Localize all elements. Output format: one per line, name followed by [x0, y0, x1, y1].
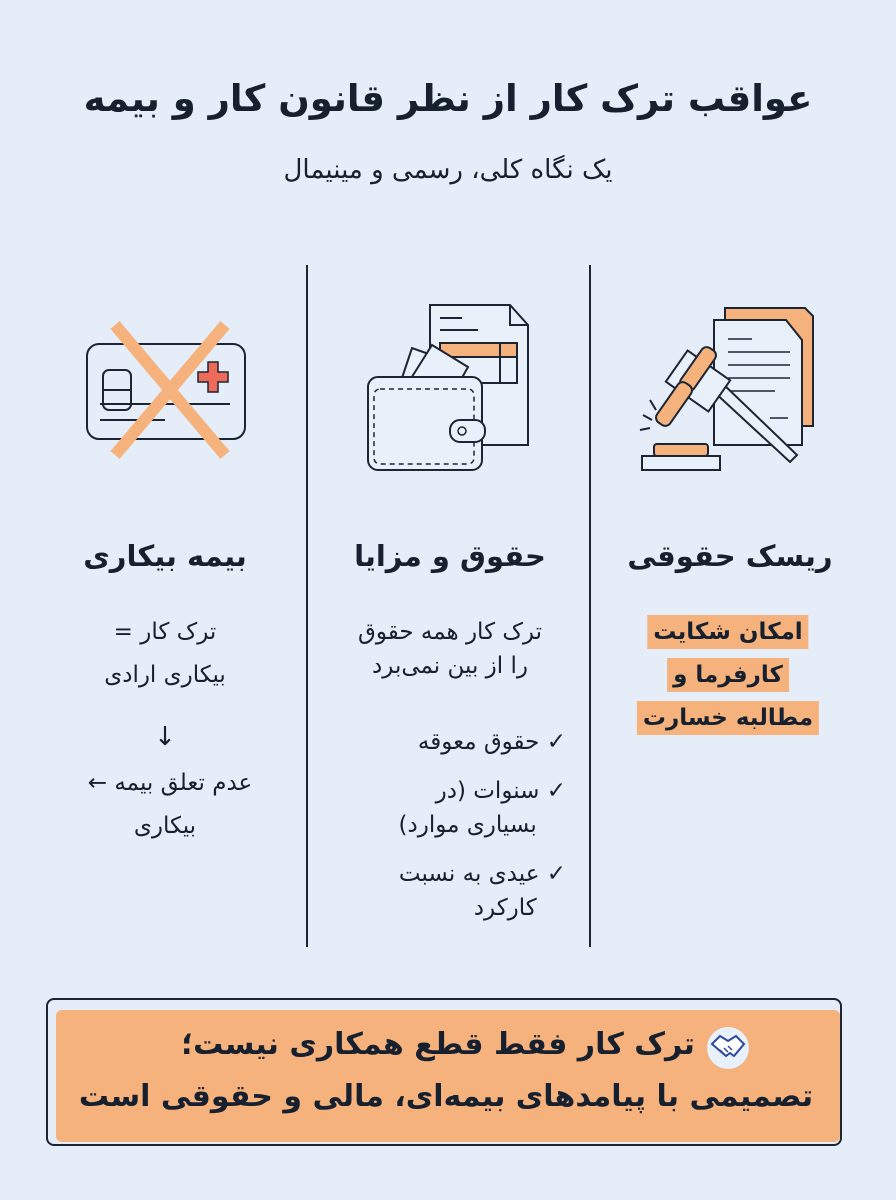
- checklist: ✓ سنوات (در: [436, 778, 566, 804]
- checklist: بسیاری موارد): [399, 812, 537, 838]
- panel: unemployment insurance: [83, 539, 252, 839]
- callout: bottom conclusion: [46, 998, 842, 1146]
- callout: bottom conclusion: تصمیمی با پیامدهای بیمه‌ای، مالی و حقوقی است: [79, 1079, 813, 1114]
- icon: gavel and documents: [640, 307, 814, 471]
- panel: legal risk: [627, 539, 833, 735]
- checklist: کارکرد: [474, 895, 537, 921]
- panel: rights and benefits: را از بین نمی‌برد: [372, 653, 528, 679]
- text: no unemployment insurance: عدم تعلق بیمه ←: [88, 770, 252, 796]
- panel: legal risk: مطالبه خسارت: [643, 705, 813, 731]
- highlighted text: employer complaint: امکان شکایت: [653, 619, 803, 645]
- text: conclusion: ترک کار فقط قطع همکاری نیست؛: [181, 1027, 695, 1062]
- subtitle: یک نگاه کلی، رسمی و مینیمال: [284, 155, 612, 185]
- panel: legal risk: کارفرما و: [673, 662, 783, 688]
- text: quitting equals voluntary unemployment: ترک کار =: [114, 619, 216, 645]
- title: عواقب ترک کار از نظر قانون کار و بیمه: [84, 77, 812, 120]
- text: quitting doesn't remove rights: ترک کار همه حقوق: [358, 619, 542, 645]
- icon: wallet and document: [367, 304, 529, 471]
- heading: legal risk: ریسک حقوقی: [627, 539, 833, 573]
- panel: rights and benefits: [354, 539, 566, 921]
- heading: rights and benefits: حقوق و مزایا: [354, 539, 546, 573]
- heading: unemployment insurance: بیمه بیکاری: [83, 539, 247, 573]
- panel: unemployment insurance: بیکاری ارادی: [104, 662, 226, 688]
- icon: handshake: [707, 1027, 749, 1069]
- checklist: [399, 729, 566, 921]
- arrow: down: ↓: [154, 722, 176, 752]
- checklist: ✓ عیدی به نسبت: [399, 861, 566, 887]
- panel: unemployment insurance: بیکاری: [134, 813, 196, 839]
- icon: insurance card crossed: [86, 321, 246, 459]
- checklist: ✓ حقوق معوقه: [418, 729, 566, 755]
